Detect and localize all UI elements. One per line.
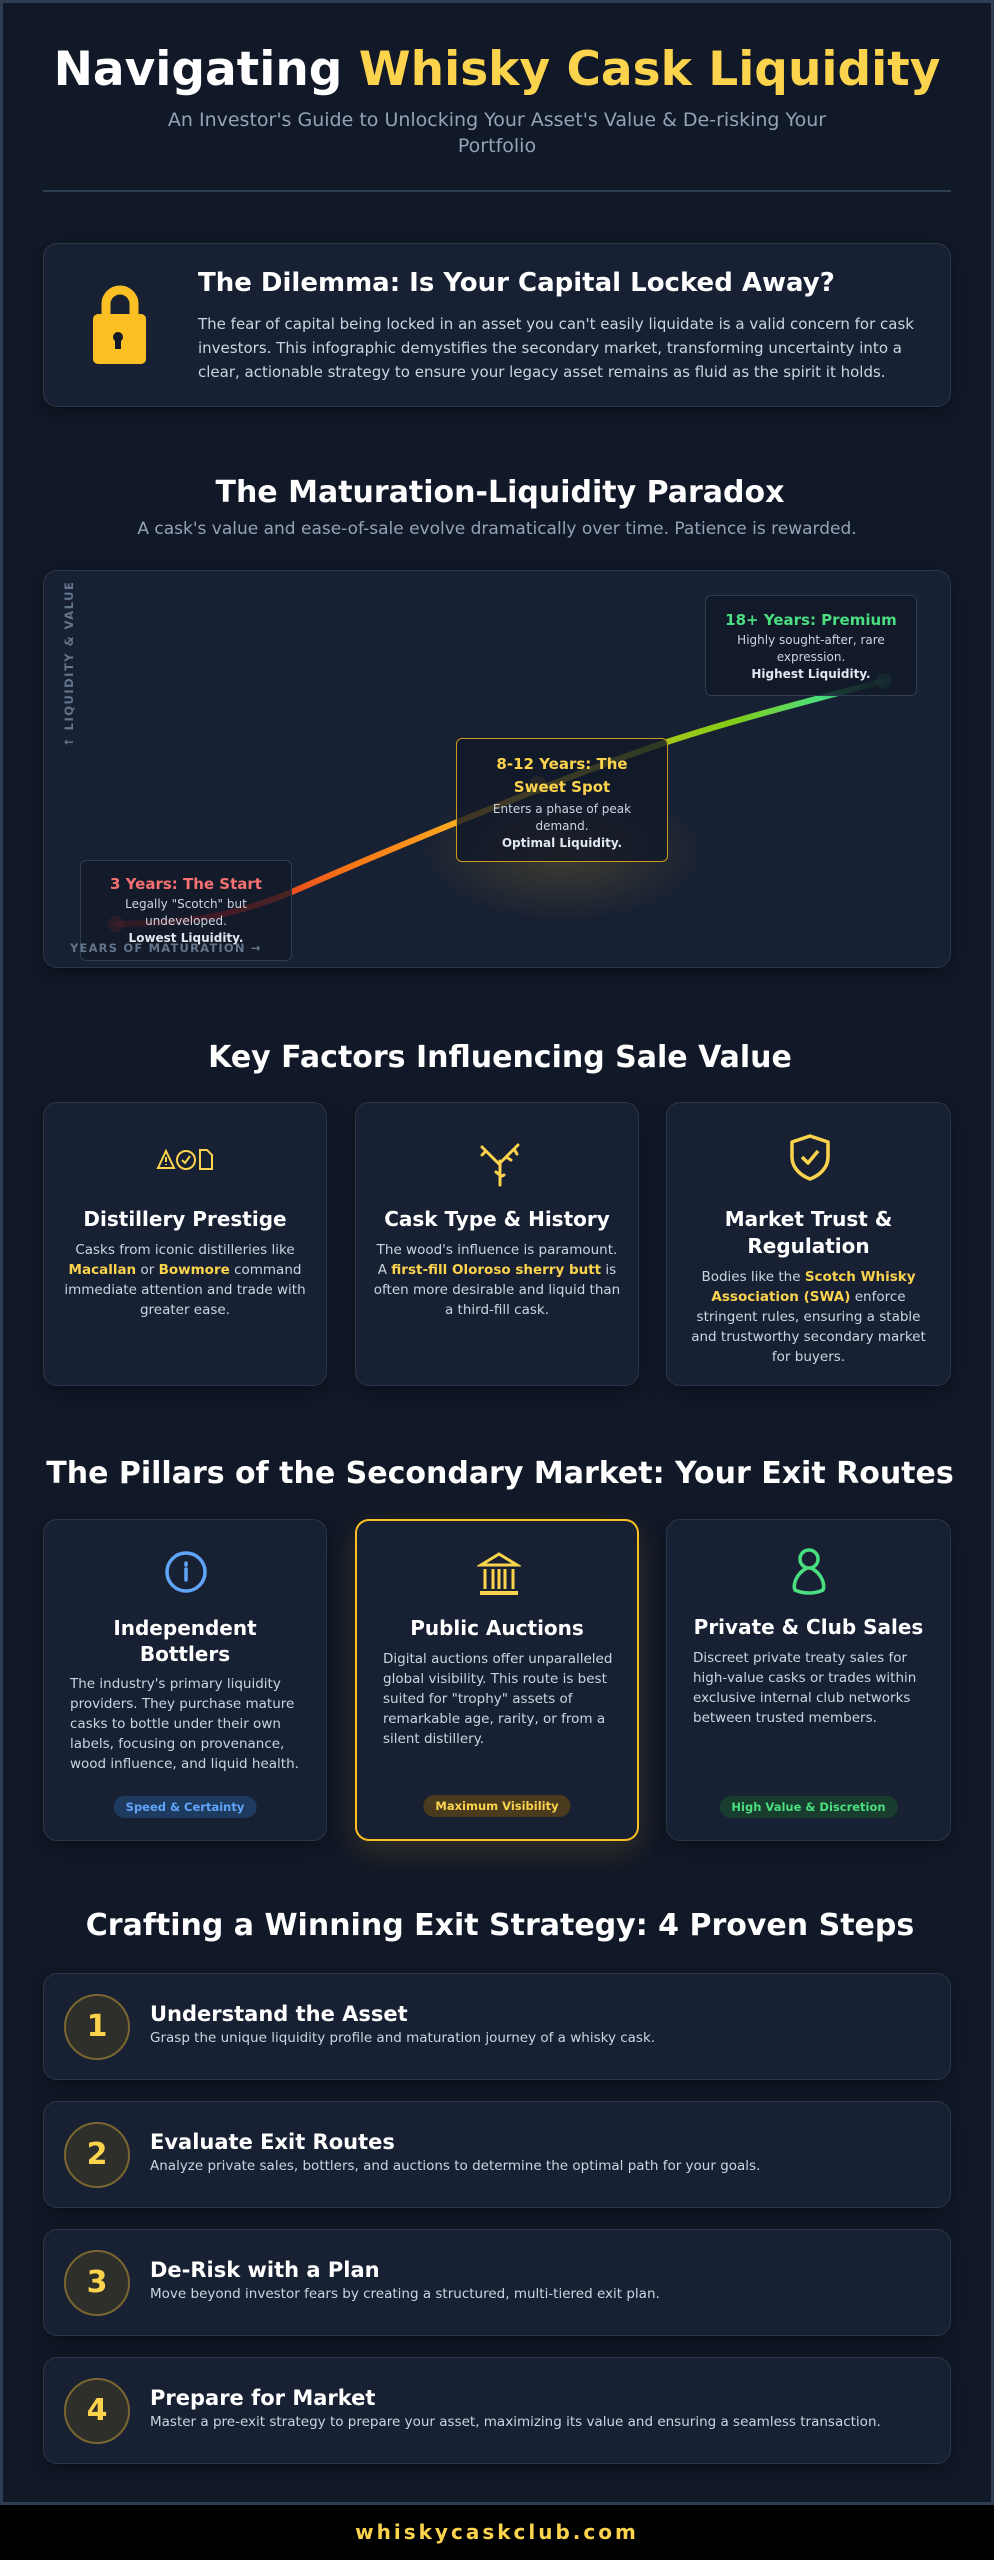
box: 18+ years: Highly sought-after, rare expression. [737,633,885,664]
panel: market trust: Market Trust & Regulation [725,1207,892,1258]
dilemma text: The fear of capital being locked in an asset you can't easily liquidate is a valid concern for cask investors. This infographic demystifies the secondary market, transforming uncertainty into a clear, actionable strategy to ensure your legacy asset remains as fluid as the spirit it holds. [198,315,914,381]
panel: public auctions: Digital auctions offer unparalleled global visibility. This route is best suited for "trophy" assets of remarkable age, rarity, or from a silent distillery. [383,1651,612,1747]
chart: maturation curve [43,570,951,968]
panel: cask type: a third-fill cask. [445,1302,549,1318]
panel: market trust: Bodies like the Scotch Whisky [701,1269,916,1285]
box: 3 years: 3 Years: The Start [110,875,262,893]
step 1: Grasp the unique liquidity profile and maturation journey of a whisky cask. [150,2030,655,2046]
footer: whiskycaskclub.com [355,2520,639,2544]
panel: cask type: The wood's influence is paramount. [377,1242,617,1258]
panel: dilemma [43,243,951,407]
box: 3 years: Legally "Scotch" but undeveloped. [125,897,247,928]
paradox subtitle: A cask's value and ease-of-sale evolve dramatically over time. Patience is rewarded. [137,519,857,539]
title: Navigating Whisky Cask Liquidity [54,42,940,97]
dilemma heading: The Dilemma: Is Your Capital Locked Away? [198,268,835,298]
heading: pillars: The Pillars of the Secondary Market: Your Exit Routes [46,1456,954,1491]
panel: private sales: Private & Club Sales [694,1615,923,1639]
heading: key factors: Key Factors Influencing Sale Value [208,1040,792,1075]
y-axis label: ↑ LIQUIDITY & VALUE [62,581,76,747]
box: 18+ years: Highest Liquidity. [751,667,871,681]
panel: independent bottlers: Independent Bottlers [113,1616,257,1666]
x-axis label: YEARS OF MATURATION → [70,941,262,955]
panel: market trust: Association (SWA) enforce [711,1289,906,1305]
tag: visibility: Maximum Visibility [435,1799,559,1813]
step 3: Move beyond investor fears by creating a structured, multi-tiered exit plan. [150,2286,660,2302]
panel: distillery prestige: greater ease. [140,1302,230,1318]
tag: speed [114,1796,256,1818]
panel: independent bottlers [43,1519,327,1841]
tag: visibility [423,1795,571,1817]
icon: lock [93,286,146,364]
tag: discretion [719,1796,898,1818]
box: 8-12 years [456,738,668,862]
box: 18+ years: 18+ Years: Premium [725,611,897,629]
heading: steps: Crafting a Winning Exit Strategy: 4 Proven Steps [86,1908,914,1943]
step 2: 2 [87,2137,107,2172]
step 4 [43,2357,951,2464]
panel: market trust: for buyers. [772,1349,845,1365]
icon: warning check doc [156,1148,213,1170]
box: 8-12 years: Enters a phase of peak demand. [493,802,631,833]
icon: shield check [790,1134,830,1181]
step 1: Understand the Asset [150,2002,408,2026]
panel: distillery prestige: Distillery Prestige [83,1207,287,1231]
icon: tree wood [480,1143,520,1186]
heading: paradox: The Maturation-Liquidity Paradox [215,475,784,510]
panel: public auctions [355,1519,639,1841]
tag: speed: Speed & Certainty [126,1800,244,1814]
panel: cask type [355,1102,639,1386]
panel: distillery prestige: immediate attention and trade with [64,1282,306,1298]
step 4: Prepare for Market [150,2386,375,2410]
panel: private sales [666,1519,951,1841]
step 2: Evaluate Exit Routes [150,2130,395,2154]
panel: private sales: Discreet private treaty sales for high-value casks or trades within exclusive internal club networks between trusted members. [693,1650,916,1726]
box: 8-12 years: 8-12 Years: The Sweet Spot [496,755,628,796]
step 3: De-Risk with a Plan [150,2258,380,2282]
box: 18+ years [705,595,917,696]
box: 3 years: Lowest Liquidity. [129,931,243,945]
step 4: Master a pre-exit strategy to prepare your asset, maximizing its value and ensuring a seamless transaction. [150,2414,881,2430]
step 3 [43,2229,951,2336]
footer [0,2505,994,2560]
panel: cask type: Cask Type & History [384,1207,610,1231]
panel: market trust: and trustworthy secondary market [691,1329,926,1345]
step 3: 3 [87,2265,107,2300]
icon: info circle [165,1551,207,1593]
panel: cask type: A first-fill Oloroso sherry butt is [378,1262,616,1278]
box: 8-12 years: Optimal Liquidity. [502,836,622,850]
subtitle: An Investor's Guide to Unlocking Your Asset's Value & De-risking Your Portfolio [168,109,826,157]
step 2: Analyze private sales, bottlers, and auctions to determine the optimal path for your goals. [150,2158,760,2174]
panel: market trust: stringent rules, ensuring a stable [697,1309,920,1325]
step 1: 1 [87,2009,107,2044]
box: 3 years [80,860,292,961]
panel: cask type: often more desirable and liquid than [374,1282,620,1298]
panel: distillery prestige: Macallan or Bowmore command [69,1262,301,1278]
step 4: 4 [87,2393,107,2428]
step 1 [43,1973,951,2080]
panel: market trust [666,1102,951,1386]
tag: discretion: High Value & Discretion [731,1800,886,1814]
panel: distillery prestige [43,1102,327,1386]
step 2 [43,2101,951,2208]
panel: public auctions: Public Auctions [410,1616,584,1640]
panel: distillery prestige: Casks from iconic distilleries like [75,1242,295,1258]
icon: bank [477,1552,521,1595]
panel: independent bottlers: The industry's primary liquidity providers. They purchase mature casks to bottle under their own labels, focusing on provenance, wood influence, and liquid health. [70,1676,299,1772]
icon: person [792,1548,826,1595]
